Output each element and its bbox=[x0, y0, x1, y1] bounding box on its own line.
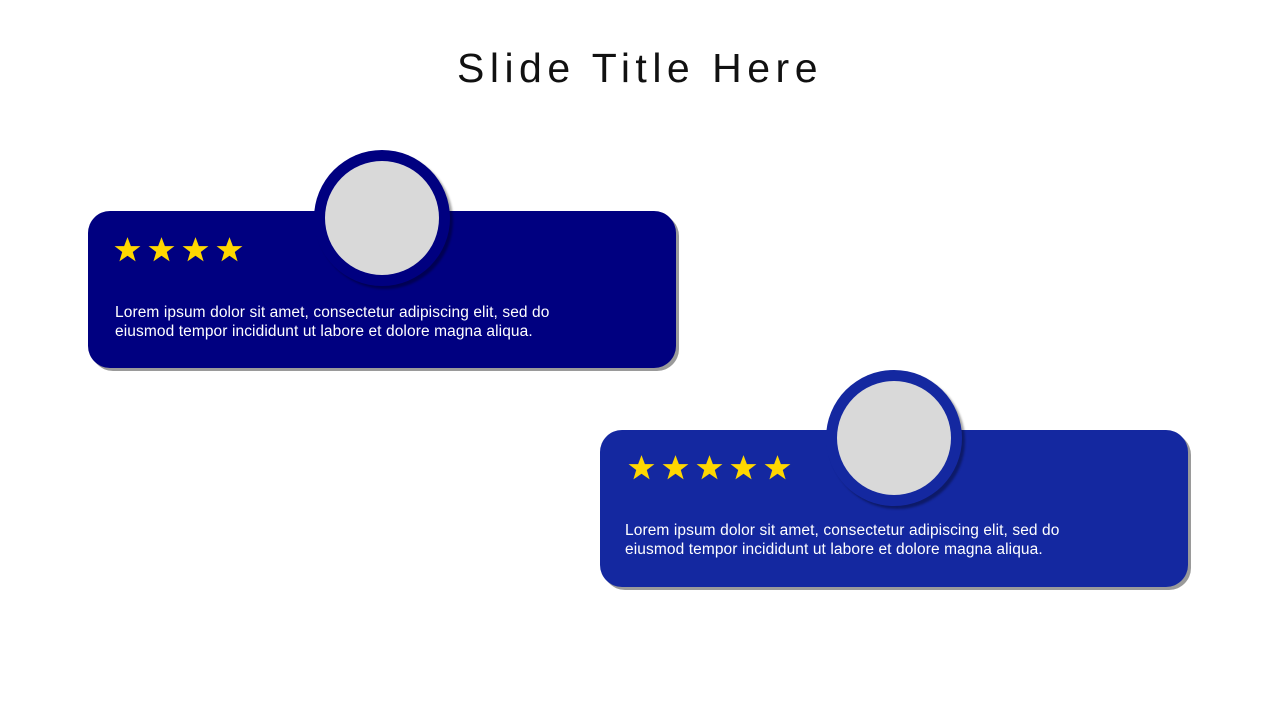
panel: card 1 bbox=[88, 211, 676, 368]
text 2: eiusmod tempor incididunt ut labore et dolore magna aliqua. bbox=[625, 541, 1043, 558]
text 2 bbox=[625, 522, 1059, 558]
stars: 5 bbox=[628, 455, 790, 480]
text 2: Lorem ipsum dolor sit amet, consectetur adipiscing elit, sed do bbox=[625, 522, 1059, 539]
icon: circle 2 bbox=[826, 370, 962, 506]
icon: circle 1 bbox=[314, 150, 450, 286]
text 1 bbox=[115, 304, 549, 340]
panel: card 2 bbox=[600, 430, 1188, 587]
text 1: Lorem ipsum dolor sit amet, consectetur adipiscing elit, sed do bbox=[115, 304, 549, 321]
title: Slide Title Here bbox=[457, 45, 823, 91]
stars: 4 bbox=[114, 237, 242, 262]
text 1: eiusmod tempor incididunt ut labore et dolore magna aliqua. bbox=[115, 323, 533, 340]
